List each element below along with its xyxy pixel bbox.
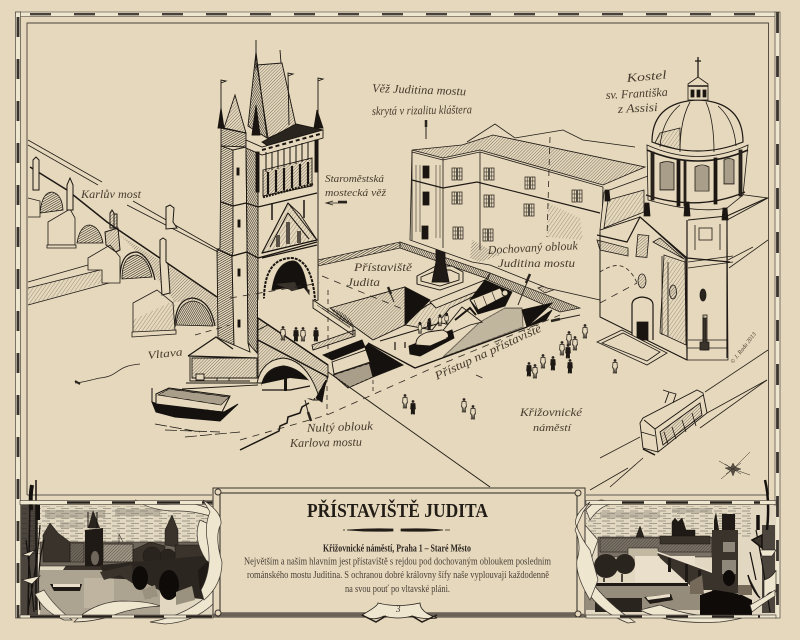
- church nave and apse: [597, 176, 768, 360]
- title: PŘÍSTAVIŠTĚ JUDITA: [307, 498, 488, 522]
- right vignette engraving: [585, 480, 776, 623]
- label: Kostel sv. Františka z Assisi: z Assisi: [616, 100, 658, 116]
- label: Vltava: Vltava: [147, 346, 184, 362]
- body text: [244, 556, 551, 595]
- label: Křižovnické náměstí: náměstí: [533, 422, 572, 434]
- label: Křižovnické náměstí: [519, 405, 583, 434]
- church statues: [605, 190, 728, 350]
- reeds right: [748, 480, 776, 613]
- Prague Castle skyline: [598, 518, 712, 560]
- left vignette bands: [20, 500, 213, 618]
- label: Věž Juditina mostu: skrytá v rizalitu kláštera: [372, 102, 472, 118]
- road and square ground lines: [28, 140, 768, 490]
- label: Věž Juditina mostu: [372, 81, 472, 118]
- label: Přístaviště Judita: Přístaviště: [353, 260, 413, 274]
- right vignette bands: [586, 500, 776, 618]
- Old Town Bridge Tower: [217, 40, 323, 353]
- bridge tower right: [700, 512, 752, 617]
- tower gallery with statues: [221, 128, 323, 197]
- arch 4: [175, 298, 215, 327]
- artist signature: © J. Rada 2013: [729, 331, 758, 365]
- gray slope and back wall: [405, 280, 512, 330]
- ramp wall with arch: [257, 318, 328, 402]
- label: Přístaviště Judita: [347, 260, 413, 289]
- Convent building: [410, 124, 645, 300]
- trees right: [594, 554, 635, 582]
- left ribbons: [35, 500, 213, 624]
- tram: [640, 390, 707, 455]
- bridge parapet band east of tower: [318, 242, 600, 312]
- label: Dochovaný oblouk Juditina mostu: Dochovaný oblouk: [486, 238, 579, 257]
- Deck and ramp by the tower: [182, 288, 355, 450]
- convent roof: [412, 135, 645, 185]
- label: Staroměstská mostecká věž: mostecká věž: [325, 187, 387, 199]
- label: Přístup na přístaviště: Přístup na přístaviště: [431, 321, 544, 383]
- label: Dochovaný oblouk Juditina mostu: Juditina mostu: [498, 256, 575, 270]
- label: Staroměstská mostecká věž: [325, 173, 387, 199]
- hatched slope: [330, 287, 405, 340]
- label: Nultý oblouk Karlova mostu: [289, 419, 374, 450]
- bridge deck upper parapet: [127, 201, 218, 252]
- church entrance and steps: [597, 235, 707, 365]
- arch 1: [40, 192, 63, 213]
- Church of St Francis: [597, 57, 768, 365]
- quay boat: [409, 330, 454, 356]
- page number scroll: [362, 603, 437, 622]
- tower spires and roof: [218, 40, 323, 146]
- black chasm: [365, 344, 403, 377]
- tower gable with sculptures: [262, 200, 317, 258]
- quay people: [418, 313, 449, 333]
- river right: [586, 556, 700, 612]
- stone vault below: [333, 363, 373, 388]
- label: Přístaviště Judita: Judita: [347, 275, 380, 289]
- city skyline left: [40, 515, 212, 572]
- label: Věž Juditina mostu: Věž Juditina mostu: [372, 81, 466, 98]
- right ribbons: [585, 500, 775, 623]
- church drum: [646, 145, 748, 210]
- label: Dochovaný oblouk Juditina mostu: [486, 238, 579, 270]
- Charles Bridge: [28, 157, 218, 337]
- dark wall: [405, 287, 430, 325]
- pointer arrows: [75, 120, 580, 421]
- location subheading: Křižovnické náměstí, Praha 1 – Staré Město: [323, 544, 471, 554]
- bridge statues: [33, 157, 177, 295]
- cartouche frame: [213, 488, 585, 617]
- bridge tower left: [85, 510, 103, 566]
- label: Nultý oblouk Karlova mostu: Nultý oblouk: [306, 419, 374, 435]
- embankment dark line: [323, 340, 365, 360]
- tower body: [217, 136, 318, 353]
- dashed route lines: [195, 137, 637, 440]
- Excavation: Judith Bridge pier and quay: [323, 280, 552, 388]
- Judith statue on octagonal pedestal: [417, 230, 463, 290]
- label: Kostel sv. Františka z Assisi: sv. Františka: [605, 85, 668, 102]
- left embankment pier: [182, 337, 258, 389]
- panel: title cartouche: [201, 488, 598, 622]
- body text: Největším a naším hlavním jest přístaviště s rejdou pod dochovaným obloukem posledním: [244, 556, 551, 568]
- reeds left: [21, 480, 44, 615]
- label: Kostel sv. Františka z Assisi: Kostel: [625, 67, 668, 85]
- compass rose: [719, 452, 750, 479]
- Charles bridge left vignette: [100, 555, 212, 605]
- pedestrians on the square: [281, 324, 617, 419]
- arch 3: [120, 252, 155, 280]
- ribbon edges over the cartouche: [201, 500, 598, 600]
- bridge diagonal right: [657, 552, 712, 594]
- body text: na svou pouť po vltavské pláni.: [345, 584, 450, 595]
- convent windows: [422, 166, 582, 241]
- left vignette engraving: [20, 480, 213, 624]
- tower forecourt deck: [258, 288, 355, 350]
- title ornament divider: [343, 529, 450, 531]
- bridge piers: [28, 198, 176, 337]
- label: Křižovnické náměstí: Křižovnické: [519, 405, 583, 419]
- body text: románského mostu Juditina. S ochranou dobré královny šífy naše vyplouvají každodenně: [247, 570, 549, 581]
- label: Nultý oblouk Karlova mostu: Karlova mostu: [289, 435, 362, 450]
- steps from quay: [240, 403, 309, 450]
- tower gateway arch: [264, 258, 315, 307]
- river: [40, 570, 160, 615]
- quay platform: [368, 305, 527, 368]
- left passenger boat: [152, 388, 240, 437]
- arch 2: [77, 225, 103, 243]
- label: Staroměstská mostecká věž: Staroměstská: [325, 173, 384, 185]
- page number scroll: 3: [395, 604, 401, 614]
- church dome and lantern: [652, 57, 743, 152]
- label: Kostel sv. Františka z Assisi: [605, 67, 668, 116]
- convent walls: [410, 150, 603, 300]
- label: Karlův most: Karlův most: [80, 187, 142, 201]
- dark passage under the arch: [522, 303, 552, 327]
